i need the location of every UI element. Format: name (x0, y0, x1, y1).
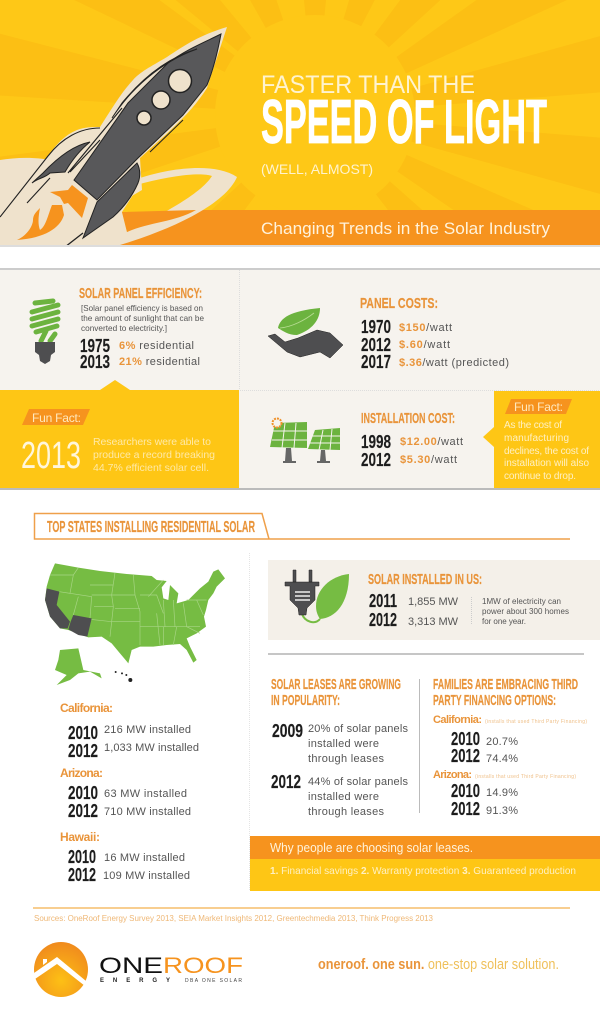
panel: solar panel efficiency (79, 285, 204, 372)
panel: Arizona: 2010 (68, 783, 98, 803)
panel: solar leases: installed were (308, 791, 379, 803)
icon: light bulb (32, 301, 58, 364)
panel: California: 1,033 MW installed (104, 742, 199, 754)
panel: Arizona (60, 766, 191, 821)
panel: third party financing: 20.7% (486, 736, 518, 748)
panel: solar leases: through leases (308, 753, 384, 765)
panel: solar installed in us: 2012 (369, 610, 397, 630)
panel: fun fact manufacturing: As the cost of (504, 420, 562, 431)
panel: installation cost: $12.00/watt (400, 436, 463, 448)
panel: fun fact manufacturing: installation will also (504, 458, 589, 469)
panel: panel costs (360, 295, 509, 372)
panel: California: California: (60, 701, 113, 715)
logo: OneRoof Energy: ONE (99, 953, 163, 978)
panel: fun fact manufacturing (483, 391, 600, 488)
panel: fun fact manufacturing: declines, the cost of (504, 446, 589, 457)
panel: solar leases: 2012 (271, 772, 301, 792)
panel: fun fact manufacturing: manufacturing (504, 433, 569, 444)
icon: hand holding leaf (268, 308, 343, 358)
panel: third party financing: 2012 (451, 799, 480, 819)
panel: third party financing (433, 676, 587, 819)
panel: third party financing: Arizona: (433, 769, 472, 781)
panel: solar leases: through leases (308, 806, 384, 818)
panel: panel costs: 1970 (361, 317, 391, 337)
panel: fun fact 2013 (0, 380, 239, 488)
panel: fun fact manufacturing: Fun Fact: (514, 400, 563, 414)
panel: Hawaii: 2010 (68, 847, 96, 867)
panel: solar installed in us: SOLAR INSTALLED IN US: (368, 571, 482, 588)
panel: installation cost: 2012 (361, 450, 391, 470)
panel: solar leases (271, 676, 408, 818)
panel: solar panel efficiency: 21% residential (119, 356, 200, 368)
panel: solar installed in us: for one year. (482, 617, 526, 626)
heading: top states (34, 514, 570, 539)
panel: fun fact 2013: 44.7% efficient solar cell. (93, 462, 209, 474)
logo: OneRoof Energy: ENERGY (100, 978, 170, 984)
sources: Sources: OneRoof Energy Survey 2013, SEIA Market Insights 2012, Greentechmedia 2013, Think Progress 2013 (34, 914, 434, 923)
panel: Hawaii: Hawaii: (60, 830, 100, 844)
panel: third party financing: 91.3% (486, 805, 518, 817)
title (261, 71, 551, 238)
panel: solar leases: IN POPULARITY: (271, 692, 340, 709)
panel: solar leases: 2009 (272, 721, 303, 741)
title: Changing Trends in the Solar Industry (261, 219, 551, 238)
panel: fun fact 2013: produce a record breaking (93, 449, 215, 461)
panel: Hawaii: 2012 (68, 865, 96, 885)
panel: panel costs: 2017 (361, 352, 391, 372)
panel: panel costs: 2012 (361, 335, 391, 355)
panel: third party financing: California: (433, 714, 482, 726)
panel: solar panel efficiency: 1975 (80, 336, 110, 356)
panel: third party financing: (installs that used Third Party Financing) (475, 774, 576, 780)
panel: California: 216 MW installed (104, 724, 191, 736)
panel: third party financing: 2010 (451, 729, 480, 749)
divider (268, 653, 584, 655)
header banner (0, 0, 600, 245)
panel: solar panel efficiency: 6% residential (119, 340, 194, 352)
panel: solar leases: 20% of solar panels (308, 723, 408, 735)
panel: Arizona: Arizona: (60, 766, 103, 780)
panel: fun fact 2013: 2013 (21, 435, 81, 477)
panel: solar leases: SOLAR LEASES ARE GROWING (271, 676, 401, 693)
panel: installation cost: $5.30/watt (400, 454, 457, 466)
title: FASTER THAN THE (261, 71, 475, 99)
panel: Hawaii (60, 830, 190, 885)
panel: third party financing: 74.4% (486, 753, 518, 765)
panel: solar panel efficiency: the amount of sunlight that can be (81, 313, 204, 323)
panel: solar installed in us: 3,313 MW (408, 616, 459, 628)
panel: solar panel efficiency: SOLAR PANEL EFFICIENCY: (79, 285, 202, 302)
panel: panel costs: $.60/watt (399, 339, 450, 351)
panel: solar panel efficiency: 2013 (80, 352, 110, 372)
panel: why solar leases: 1. Financial savings 2. Warranty protection 3. Guaranteed production (270, 865, 576, 877)
panel: panel costs: $.36/watt (predicted) (399, 357, 509, 369)
panel: solar panel efficiency: converted to electricity.] (81, 323, 167, 333)
logo: OneRoof Energy: DBA ONE SOLAR (185, 978, 242, 984)
map: United States (45, 563, 225, 685)
logo: OneRoof Energy: ROOF (163, 953, 243, 978)
panel: solar panel efficiency: [Solar panel efficiency is based on (81, 303, 203, 313)
header bottom rule (0, 245, 600, 247)
panel: Hawaii: 109 MW installed (103, 870, 190, 882)
panel: solar leases: 44% of solar panels (308, 776, 408, 788)
panel: third party financing: 14.9% (486, 787, 518, 799)
panel: California: 2010 (68, 723, 98, 743)
panel: fun fact 2013: Researchers were able to (93, 436, 211, 448)
panel: fun fact 2013: Fun Fact: (32, 411, 81, 425)
panel: panel costs: $150/watt (399, 322, 452, 334)
panel: Arizona: 710 MW installed (104, 806, 191, 818)
panel: California: 2012 (68, 741, 98, 761)
panel: Arizona: 2012 (68, 801, 98, 821)
panel: Hawaii: 16 MW installed (104, 852, 185, 864)
heading: top states: TOP STATES INSTALLING RESIDENTIAL SOLAR (47, 519, 255, 536)
tagline: oneroof. one sun. one-stop solar solution. (318, 956, 559, 973)
panel: third party financing: 2010 (451, 781, 480, 801)
logo: OneRoof Energy (34, 942, 243, 997)
panel: third party financing: (installs that used Third Party Financing) (485, 719, 587, 725)
panel: third party financing: 2012 (451, 746, 480, 766)
panel: fun fact manufacturing: continue to drop. (504, 471, 576, 482)
orange title band (110, 210, 600, 245)
panel: why solar leases (250, 836, 600, 891)
panel: stats background (0, 268, 600, 490)
title: (WELL, ALMOST) (261, 161, 373, 177)
panel: solar leases: installed were (308, 738, 379, 750)
panel: installation cost (361, 410, 463, 470)
panel: solar installed in us: 1,855 MW (408, 596, 459, 608)
panel: installation cost: INSTALLATION COST: (361, 410, 455, 427)
icon: solar panels (270, 418, 341, 463)
panel: solar installed in us: power about 300 homes (482, 607, 569, 616)
panel: solar installed in us: 2011 (369, 591, 397, 611)
panel: panel costs: PANEL COSTS: (360, 295, 438, 312)
panel: installation cost: 1998 (361, 432, 391, 452)
panel: why solar leases: Why people are choosing solar leases. (270, 840, 473, 855)
panel: California (60, 701, 199, 761)
rocket illustration (0, 27, 237, 247)
icon: plug and leaf (285, 570, 349, 622)
panel: solar installed in us: 1MW of electricity can (482, 597, 561, 606)
panel: solar installed in us (268, 560, 600, 640)
panel: Arizona: 63 MW installed (104, 788, 187, 800)
